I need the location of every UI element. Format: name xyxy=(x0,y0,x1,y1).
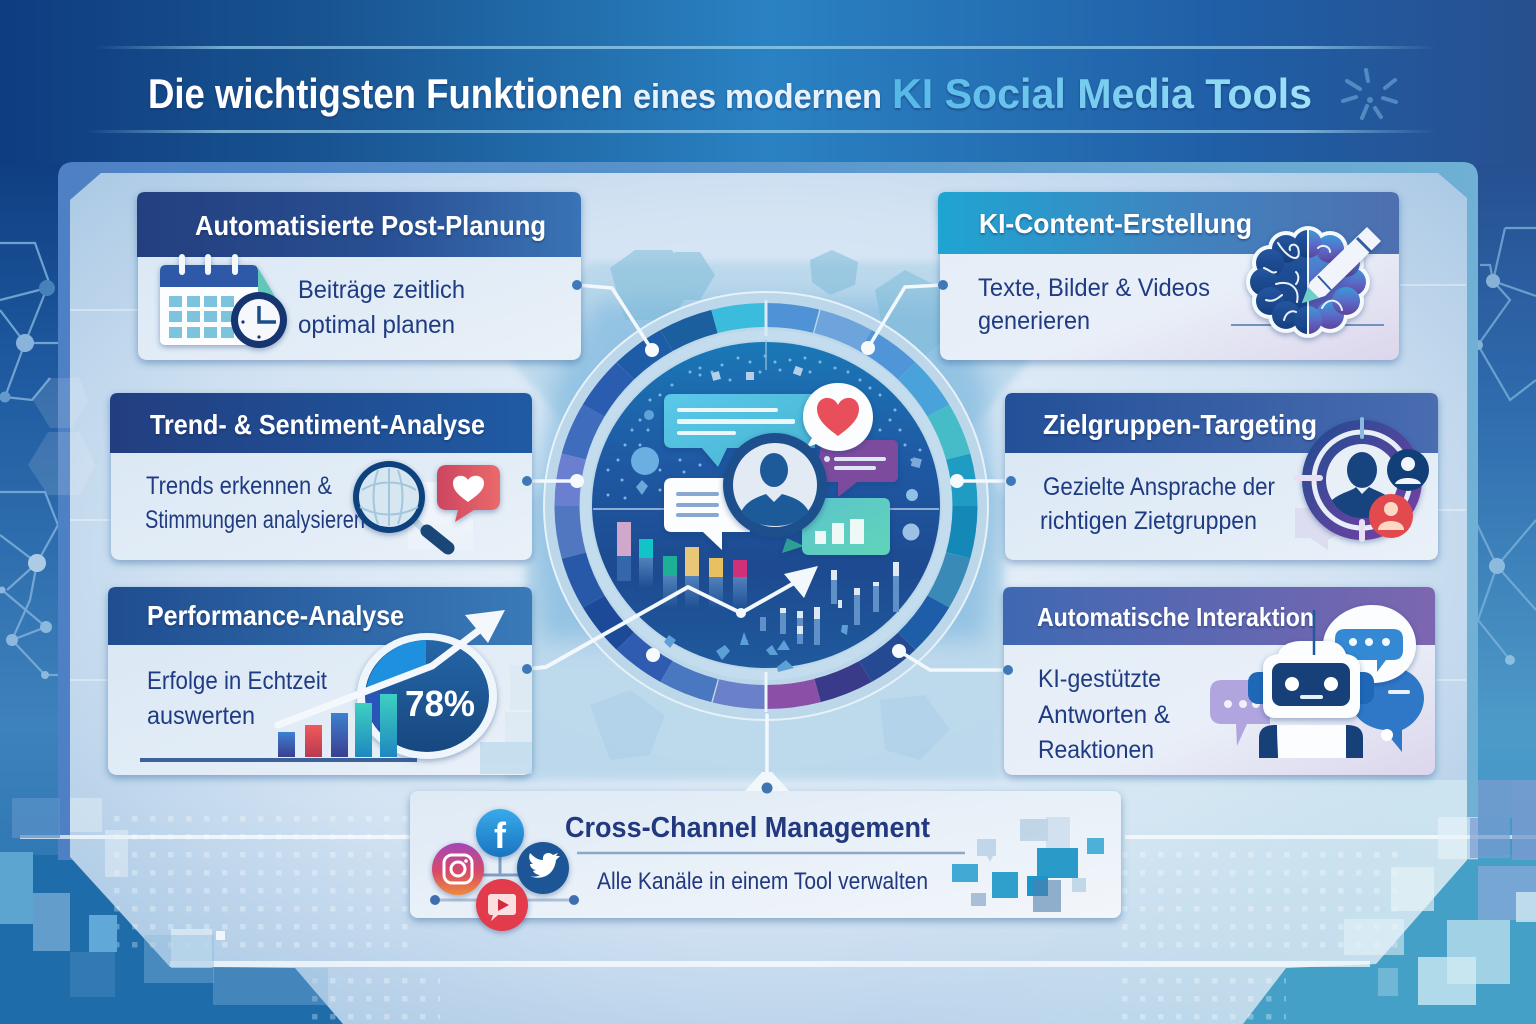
card: Trend- & Sentiment-Analyse xyxy=(110,393,532,560)
icon: YouTube xyxy=(476,879,528,931)
card header xyxy=(137,192,581,257)
hub backdrop xyxy=(505,250,1030,780)
growth arrow xyxy=(527,566,818,669)
hub right bars xyxy=(664,562,899,672)
icon: target audience xyxy=(1295,419,1429,550)
card background xyxy=(137,192,581,360)
description: Texte, Bilder & Videos xyxy=(978,274,1210,302)
title: Die wichtigsten Funktionen xyxy=(148,70,623,117)
description: Stimmungen analysieren xyxy=(145,506,365,534)
card: Zielgruppen-Targeting xyxy=(1005,393,1438,560)
icon: magnifier and heart xyxy=(353,461,500,550)
description: Erfolge in Echtzeit xyxy=(147,667,327,695)
heading: Automatisierte Post-Planung xyxy=(195,210,546,241)
stat value: 78% xyxy=(405,683,475,724)
hub outer ring xyxy=(544,292,988,720)
description: Antworten & xyxy=(1038,701,1170,729)
hub chart bars xyxy=(617,522,747,609)
title: eines modernen xyxy=(633,78,882,116)
description: generieren xyxy=(978,307,1090,335)
decorative pixel cluster xyxy=(952,817,1104,912)
decorative hexes at frame edge xyxy=(28,378,95,495)
icon: Twitter xyxy=(517,842,569,894)
hub blobs xyxy=(631,366,922,540)
connectors xyxy=(527,285,1011,788)
heading: Zielgruppen-Targeting xyxy=(1043,409,1317,440)
icon: brain and pencil xyxy=(1231,226,1384,338)
description: Reaktionen xyxy=(1038,736,1154,764)
speech bubble: white xyxy=(664,478,750,550)
side network: right xyxy=(1473,228,1536,665)
description: Alle Kanäle in einem Tool verwalten xyxy=(597,868,928,895)
hub inner ring xyxy=(585,335,947,675)
card: Automatische Interaktion xyxy=(1003,587,1435,775)
avatar xyxy=(723,433,827,537)
growth arrow xyxy=(278,625,486,725)
icon: KPI gauge and bar chart xyxy=(140,610,505,762)
card: KI-Content-Erstellung xyxy=(938,192,1399,360)
icon: Facebook xyxy=(476,809,524,857)
card: Performance-Analyse xyxy=(108,587,532,775)
bottom glow lines xyxy=(20,835,1536,967)
pencil xyxy=(1302,227,1381,303)
description: Gezielte Ansprache der xyxy=(1043,473,1275,501)
hub colour segments xyxy=(485,236,1047,776)
icon: calendar and clock xyxy=(160,254,287,348)
description: auswerten xyxy=(147,702,255,730)
heading: Performance-Analyse xyxy=(147,600,404,631)
description: Beiträge zeitlich xyxy=(298,276,465,304)
description: KI-gestützte xyxy=(1038,665,1161,693)
icon: social channels xyxy=(430,809,579,931)
panel: main frame xyxy=(58,162,1478,1024)
hub disc xyxy=(592,342,940,668)
side network: left xyxy=(0,243,60,679)
icon: title spark xyxy=(1343,70,1396,118)
icon: Facebook: f xyxy=(494,815,507,856)
description: richtigen Zietgruppen xyxy=(1040,507,1257,535)
connector nodes xyxy=(570,341,964,662)
icon: Instagram xyxy=(432,843,484,895)
speech bubble: purple xyxy=(815,440,898,497)
particles xyxy=(608,356,920,498)
dot grid: lower field xyxy=(108,815,1410,1024)
robot xyxy=(1248,610,1374,758)
central hub xyxy=(543,291,989,721)
card: Cross-Channel Management xyxy=(410,772,1121,931)
title: KI Social Media Tools xyxy=(892,70,1312,117)
description: optimal planen xyxy=(298,311,455,339)
speech bubble: heart xyxy=(803,383,873,451)
heading: Trend- & Sentiment-Analyse xyxy=(150,409,485,440)
decorative pixels: lower right xyxy=(1344,780,1536,1005)
heading: Cross-Channel Management xyxy=(565,812,930,844)
icon: chatbot xyxy=(1210,605,1424,758)
heading: Automatische Interaktion xyxy=(1037,602,1314,632)
heading: KI-Content-Erstellung xyxy=(979,208,1252,239)
card: Automatisierte Post-Planung xyxy=(137,192,582,360)
decorative pixels: lower left xyxy=(0,798,328,1005)
speech bubble: mini chart xyxy=(782,498,890,555)
description: Trends erkennen & xyxy=(146,472,332,500)
speech bubble: text cyan xyxy=(664,394,815,467)
title rules xyxy=(85,46,1435,133)
